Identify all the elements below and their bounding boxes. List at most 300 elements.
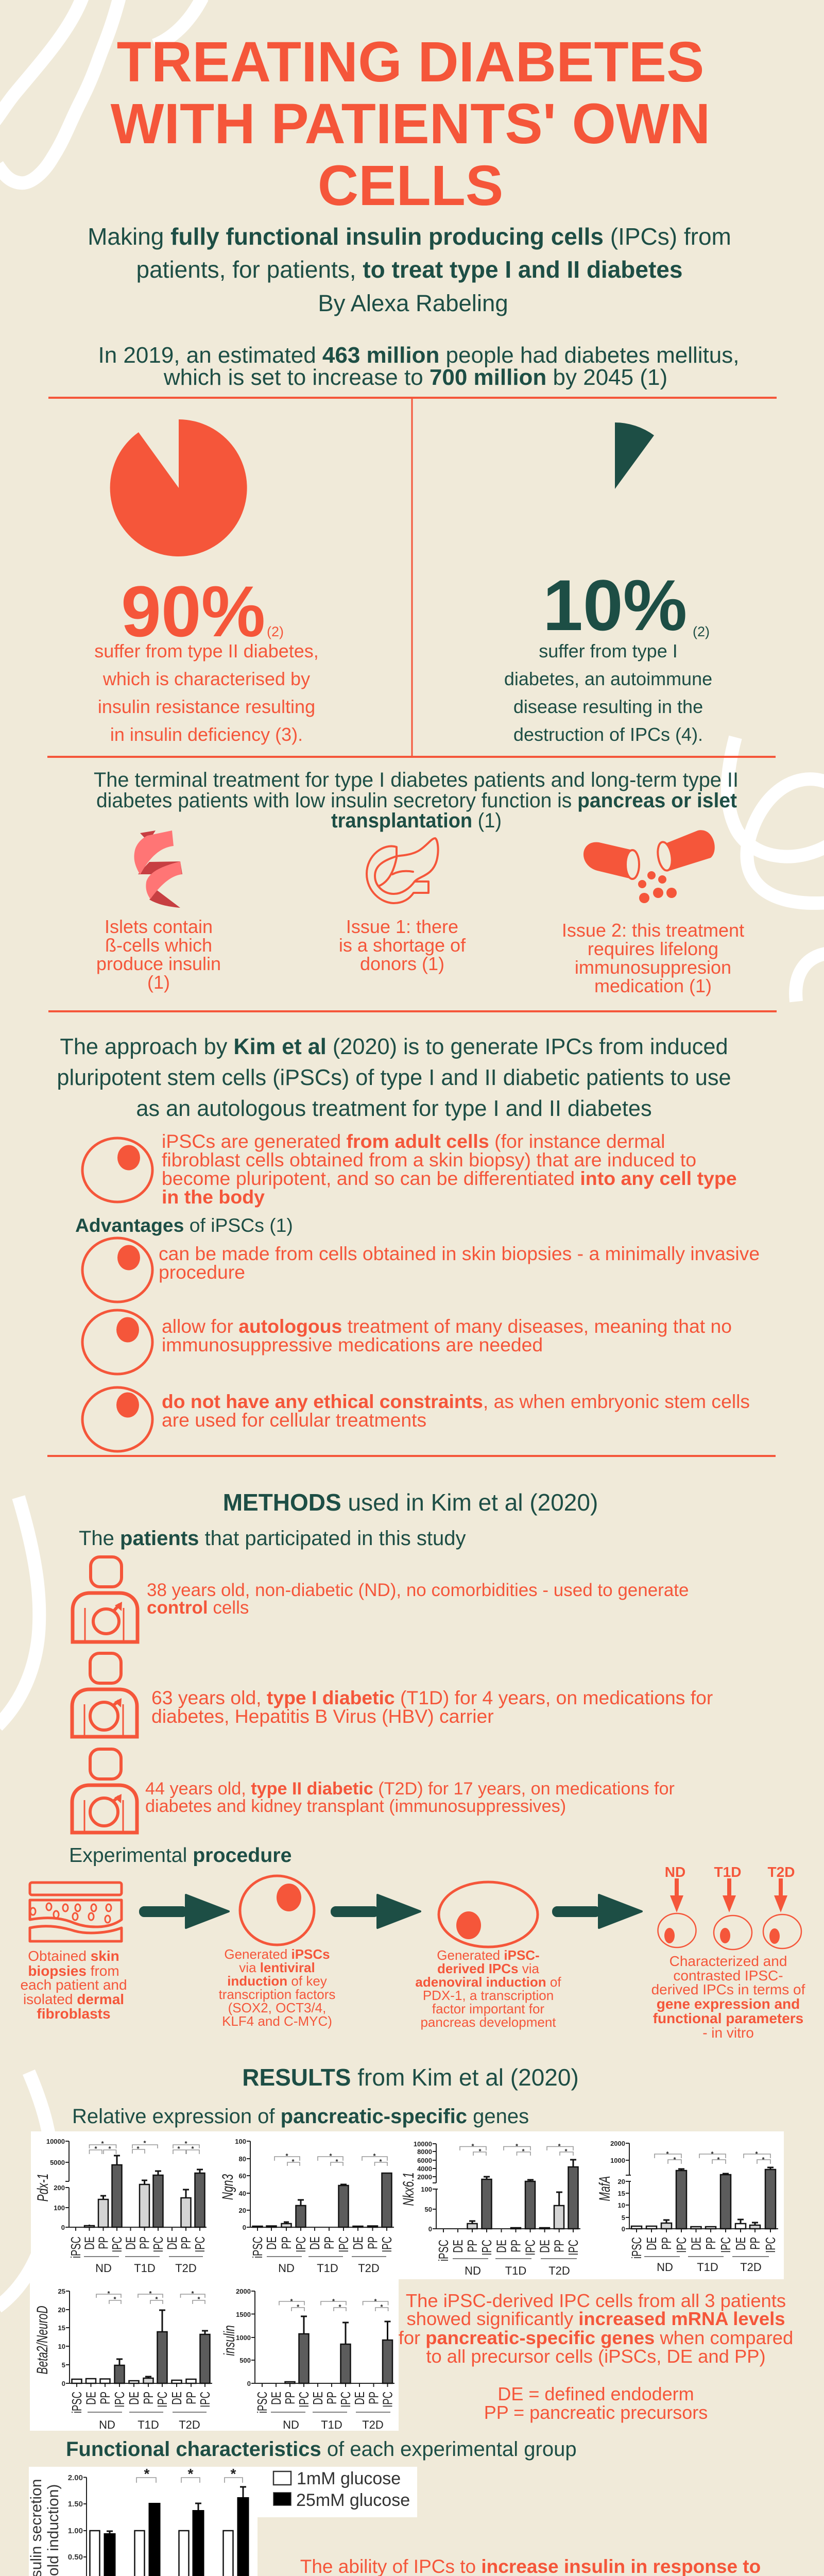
advantage 1	[159, 1243, 760, 1283]
icon: pills	[583, 830, 715, 903]
chart: Nkx6.1: IPC	[479, 2240, 494, 2256]
chart: insulin: 0	[247, 2380, 251, 2387]
chart: Beta2/NeuroD: 5	[62, 2361, 65, 2369]
chart: Pdx-1: *	[184, 2140, 187, 2147]
chart: insulin secretion: 2.00	[68, 2473, 83, 2482]
patient 1 text: control cells	[147, 1598, 249, 1618]
terminal treatment text: transplantation (1)	[331, 809, 502, 832]
chart: Pdx-1: T2D	[175, 2262, 197, 2275]
approach text: as an autologous treatment for type I and II diabetes	[136, 1096, 652, 1121]
chart: Ngn3: IPC	[380, 2236, 394, 2252]
icon: cell 4	[82, 1387, 152, 1451]
description: which is characterised by	[102, 668, 310, 689]
chart: insulin: IPC	[338, 2392, 353, 2408]
title: WITH PATIENTS' OWN	[111, 92, 710, 156]
approach text: pluripotent stem cells (iPSCs) of type I and II diabetic patients to use	[57, 1065, 731, 1090]
chart: insulin: *	[380, 2303, 383, 2311]
chart: Nkx6.1: Nkx6.1	[401, 2172, 417, 2206]
description: disease resulting in the	[513, 696, 703, 717]
chart: MafA: IPC	[763, 2237, 778, 2253]
chart: Nkx6.1: 0	[428, 2225, 432, 2233]
caption: characterization: derived IPCs in terms of	[651, 1981, 805, 1997]
approach text: The approach by Kim et al (2020) is to generate IPCs from induced	[60, 1035, 728, 1059]
caption: characterization: functional parameters	[653, 2010, 803, 2026]
caption: iPSC generation	[219, 1946, 335, 2029]
chart: Ngn3: DE	[351, 2236, 366, 2250]
chart: Ngn3: *	[285, 2152, 288, 2160]
description: destruction of IPCs (4).	[513, 724, 703, 745]
caption: characterization: - in vitro	[702, 2025, 754, 2041]
terminal treatment text	[94, 769, 739, 832]
approach text	[57, 1035, 731, 1121]
chart: Nkx6.1: PP	[552, 2240, 566, 2252]
chart: insulin: *	[290, 2297, 293, 2305]
intro statistic text: which is set to increase to 700 million by 2045 (1)	[163, 365, 667, 390]
functional heading: Functional characteristics of each experimental group	[66, 2438, 577, 2461]
chart: insulin secretion: *	[144, 2466, 150, 2482]
chart: Pdx-1: PP	[138, 2236, 152, 2249]
chart: Ngn3	[220, 2138, 394, 2275]
chart: MafA: 1000	[610, 2157, 625, 2164]
icon: iPSC cell	[240, 1876, 314, 1945]
caption: iPSC generation: induction of key	[227, 1973, 327, 1989]
chart: Nkx6.1: ND	[465, 2264, 481, 2277]
panel: type I diabetes 10%	[504, 422, 712, 745]
chart: Ngn3: 80	[239, 2155, 246, 2163]
chart: insulin: T2D	[362, 2418, 384, 2431]
icon: cell 2	[82, 1238, 152, 1302]
abbreviations legend	[484, 2383, 708, 2423]
chart: Beta2/NeuroD: *	[191, 2290, 194, 2297]
chart: Beta2/NeuroD: DE	[127, 2392, 142, 2405]
chart: Nkx6.1: DE	[494, 2240, 509, 2253]
chart: Nkx6.1: DE	[538, 2240, 552, 2253]
description: insulin resistance resulting	[98, 696, 315, 717]
patient 3 text	[145, 1779, 675, 1816]
chart: Nkx6.1: IPC	[523, 2240, 538, 2256]
chart: insulin secretion	[28, 2466, 251, 2576]
title: TREATING DIABETES	[117, 30, 704, 94]
caption: issue 1: donors (1)	[360, 953, 444, 974]
icon: skin	[30, 1883, 122, 1941]
caption: iPSC generation: transcription factors	[219, 1987, 335, 2002]
results text: mRNA levels: showed significantly increased mRNA levels	[407, 2308, 785, 2329]
caption: characterization: Characterized and	[670, 1953, 787, 1969]
patient 2 text: diabetes, Hepatitis B Virus (HBV) carrier	[151, 1705, 494, 1727]
advantages heading: Advantages of iPSCs (1)	[75, 1214, 293, 1236]
chart: Beta2/NeuroD: 0	[62, 2380, 65, 2387]
title	[111, 30, 710, 217]
group labels and arrows: ND	[665, 1864, 685, 1880]
group labels and arrows: T2D	[768, 1864, 795, 1880]
chart: MafA: T1D	[697, 2261, 718, 2274]
caption: iPSC generation: Generated iPSCs	[224, 1946, 330, 1962]
group labels and arrows	[658, 1864, 801, 1950]
chart: Pdx-1: *	[101, 2140, 104, 2147]
chart: Ngn3: *	[373, 2152, 376, 2160]
expression heading: Relative expression of pancreatic-specific genes	[72, 2105, 529, 2128]
description: diabetes, an autoimmune	[504, 668, 712, 689]
chart: Beta2/NeuroD: 25	[58, 2287, 65, 2295]
chart: Pdx-1: T1D	[134, 2262, 156, 2275]
panel: gene expression charts top	[31, 2131, 784, 2279]
caption: issue 2: Issue 2: this treatment	[562, 920, 744, 941]
caption: issue 2: medication (1)	[594, 975, 712, 996]
chart: insulin: *	[297, 2303, 300, 2311]
chart: insulin: *	[338, 2303, 341, 2311]
chart: Beta2/NeuroD: DE	[169, 2392, 184, 2405]
legend	[258, 2467, 417, 2517]
chart: insulin secretion: *	[231, 2466, 236, 2482]
chart: Nkx6.1: 8000	[417, 2148, 432, 2156]
chart: Nkx6.1: *	[564, 2147, 568, 2155]
chart: Pdx-1: Pdx-1	[35, 2174, 52, 2201]
advantage 2: allow for autologous treatment of many diseases, meaning that no	[162, 1315, 732, 1337]
subtitle: patients, for patients, to treat type I and II diabetes	[136, 256, 682, 283]
chart: Nkx6.1: 4000	[417, 2165, 432, 2173]
results heading: RESULTS from Kim et al (2020)	[242, 2064, 579, 2091]
chart: Pdx-1: DE	[165, 2236, 180, 2250]
chart: Nkx6.1: *	[471, 2142, 474, 2150]
patient 3 text: 44 years old, type II diabetic (T2D) for 17 years, on medications for	[145, 1779, 675, 1799]
chart: MafA: *	[673, 2156, 676, 2163]
chart: Pdx-1: *	[191, 2145, 194, 2153]
chart: Beta2/NeuroD: Beta2/NeuroD	[35, 2306, 51, 2374]
chart: Nkx6.1: iPSC	[436, 2240, 451, 2261]
description	[94, 640, 319, 745]
patient 2 text	[151, 1687, 713, 1727]
chart: Ngn3: IPC	[336, 2236, 351, 2252]
chart: Pdx-1: iPSC	[68, 2236, 83, 2258]
chart: insulin	[221, 2287, 395, 2431]
chart: insulin: *	[374, 2297, 377, 2305]
stat: 90%: 90%	[121, 571, 265, 652]
chart: insulin: 2000	[236, 2287, 251, 2295]
advantage 2	[162, 1315, 732, 1355]
caption: characterization: contrasted IPSC-	[673, 1968, 783, 1984]
chart: Pdx-1: IPC	[193, 2236, 208, 2252]
chart: MafA: PP	[703, 2237, 718, 2250]
chart: MafA: 10	[618, 2201, 625, 2209]
chart: MafA: PP	[659, 2237, 674, 2250]
icon: pancreas	[367, 838, 438, 903]
chart: insulin: 1500	[236, 2311, 251, 2318]
chart: MafA	[597, 2140, 778, 2274]
subtitle: Making fully functional insulin producing cells (IPCs) from	[88, 223, 731, 250]
results text: mRNA levels	[399, 2290, 793, 2367]
caption: biopsy: Obtained skin	[28, 1948, 119, 1964]
results text: mRNA levels: to all precursor cells (iPSCs, DE and PP)	[426, 2346, 766, 2367]
chart: Beta2/NeuroD: iPSC	[70, 2392, 84, 2413]
chart: MafA: *	[755, 2150, 758, 2158]
chart: Nkx6.1: 2000	[417, 2173, 432, 2181]
chart: insulin: T1D	[321, 2418, 342, 2431]
chart: insulin: DE	[352, 2392, 367, 2405]
chart: Nkx6.1	[401, 2140, 581, 2277]
patient 1 text	[147, 1580, 689, 1618]
caption: issue 1	[339, 916, 466, 974]
advantage 3	[162, 1391, 750, 1431]
terminal treatment text: The terminal treatment for type I diabetes patients and long-term type II	[94, 769, 739, 791]
methods heading: METHODS used in Kim et al (2020)	[223, 1489, 598, 1516]
stat: 10%: 10%	[543, 565, 687, 646]
chart: MafA: ND	[657, 2261, 673, 2274]
chart: Pdx-1: IPC	[110, 2236, 125, 2252]
chart: MafA: *	[666, 2150, 669, 2158]
icon: IPC cell	[439, 1882, 538, 1947]
group labels and arrows: T1D	[714, 1864, 741, 1880]
chart: Pdx-1: PP	[179, 2236, 194, 2249]
chart: Nkx6.1: T1D	[505, 2264, 526, 2277]
chart: Beta2/NeuroD: T2D	[179, 2418, 200, 2431]
caption: IPC generation	[415, 1947, 561, 2030]
chart: Pdx-1: 10000	[46, 2138, 65, 2145]
caption: IPC generation: pancreas development	[420, 2014, 556, 2030]
chart: Pdx-1: PP	[96, 2236, 111, 2249]
chart: Ngn3: 0	[243, 2224, 246, 2231]
caption: IPC generation: PDX-1, a transcription	[423, 1988, 554, 2003]
iPSC description	[162, 1130, 737, 1208]
icon: patient 3	[72, 1749, 137, 1833]
chart: Ngn3: *	[291, 2158, 295, 2165]
iPSC description: in the body	[162, 1186, 265, 1208]
chart: insulin: PP	[324, 2392, 339, 2404]
chart: Pdx-1: 0	[61, 2224, 65, 2231]
terminal treatment text: diabetes patients with low insulin secretory function is pancreas or islet	[96, 789, 737, 812]
chart: insulin secretion: 1.50	[68, 2500, 83, 2509]
chart: Pdx-1: 5000	[50, 2159, 65, 2166]
chart: Ngn3: 40	[239, 2190, 246, 2197]
chart: insulin: PP	[366, 2392, 381, 2404]
chart: Beta2/NeuroD: T1D	[138, 2418, 159, 2431]
chart: insulin: insulin	[221, 2325, 238, 2356]
chart: Ngn3: Ngn3	[220, 2174, 236, 2200]
chart: Beta2/NeuroD: *	[113, 2295, 116, 2303]
arrow 1	[140, 1895, 229, 1928]
advantage 2: immunosuppressive medications are needed	[162, 1334, 543, 1355]
chart: Beta2/NeuroD: ND	[99, 2418, 115, 2431]
chart: Beta2/NeuroD: PP	[184, 2392, 199, 2404]
caption: issue 1: Issue 1: there	[346, 916, 458, 937]
caption: biopsy: fibroblasts	[37, 2006, 111, 2022]
chart: Nkx6.1: PP	[508, 2240, 523, 2252]
icon: cell 3	[82, 1310, 152, 1374]
intro statistic text	[98, 343, 740, 390]
chart: MafA: iPSC	[629, 2237, 644, 2259]
advantage 1: procedure	[159, 1261, 245, 1283]
reference marker: (2)	[267, 624, 284, 639]
chart: MafA: DE	[733, 2237, 748, 2250]
pie chart: 10%	[615, 422, 654, 489]
chart: Nkx6.1: *	[522, 2147, 525, 2155]
chart: MafA: PP	[748, 2237, 763, 2250]
caption: biopsy	[20, 1948, 127, 2022]
pie chart: 90%	[110, 419, 247, 556]
chart: Ngn3: *	[329, 2152, 332, 2160]
chart: Beta2/NeuroD: PP	[141, 2392, 156, 2404]
chart: MafA: DE	[689, 2237, 703, 2250]
chart: Beta2/NeuroD	[35, 2287, 213, 2431]
chart: Pdx-1: 200	[54, 2184, 65, 2192]
reference marker: (2)	[693, 624, 710, 639]
icon: patient 1	[73, 1557, 138, 1642]
iPSC description: become pluripotent, and so can be differentiated into any cell type	[162, 1167, 737, 1189]
legend: 25mM glucose	[296, 2490, 410, 2510]
iPSC description: iPSCs are generated from adult cells (for instance dermal	[162, 1130, 665, 1152]
subtitle: By Alexa Rabeling	[318, 290, 508, 316]
chart: MafA: 15	[618, 2190, 625, 2197]
advantage 3: do not have any ethical constraints, as when embryonic stem cells	[162, 1391, 750, 1412]
chart: Nkx6.1: DE	[451, 2240, 466, 2253]
caption: iPSC generation: (SOX2, OCT3/4,	[228, 2000, 326, 2015]
caption: issue 2: requires lifelong	[588, 938, 718, 959]
chart: Nkx6.1: *	[478, 2147, 482, 2155]
chart: Beta2/NeuroD: *	[197, 2295, 200, 2303]
chart: insulin: *	[332, 2297, 335, 2305]
chart: Beta2/NeuroD: DE	[83, 2392, 98, 2405]
chart: Ngn3: *	[379, 2158, 382, 2165]
chart: insulin: 1000	[236, 2334, 251, 2342]
patient 3 text: diabetes and kidney transplant (immunosuppressives)	[145, 1797, 566, 1816]
chart: Beta2/NeuroD: *	[107, 2290, 110, 2297]
chart: insulin: ND	[283, 2418, 299, 2431]
chart: Ngn3: *	[335, 2158, 338, 2165]
caption: biopsy: isolated dermal	[23, 1991, 124, 2007]
chart: MafA: T2D	[740, 2261, 762, 2274]
chart: Nkx6.1: 50	[425, 2206, 432, 2213]
caption: islets: ß-cells which	[105, 935, 212, 956]
chart: Nkx6.1: 6000	[417, 2157, 432, 2164]
description: in insulin deficiency (3).	[110, 724, 303, 745]
chart: Nkx6.1: IPC	[566, 2240, 581, 2256]
chart: Ngn3: PP	[322, 2236, 337, 2249]
caption: IPC generation: Generated iPSC-	[437, 1947, 540, 1963]
caption: issue 2: immunosuppresion	[575, 957, 731, 978]
chart: Pdx-1: *	[177, 2145, 180, 2153]
chart: Pdx-1: 100	[54, 2204, 65, 2212]
chart: insulin: DE	[311, 2392, 325, 2405]
chart: Ngn3: 20	[239, 2207, 246, 2214]
chart: Pdx-1: DE	[82, 2236, 97, 2250]
caption: IPC generation: factor important for	[432, 2001, 544, 2016]
chart: Beta2/NeuroD: IPC	[155, 2392, 170, 2408]
chart: Pdx-1: *	[108, 2145, 111, 2153]
arrow 3	[553, 1895, 642, 1928]
caption: characterization: gene expression and	[657, 1996, 800, 2012]
caption: biopsy: biopsies from	[28, 1963, 119, 1979]
caption: characterization	[651, 1953, 805, 2041]
description: suffer from type I	[539, 640, 678, 662]
chart: MafA: MafA	[597, 2176, 613, 2201]
chart: Nkx6.1: 10000	[414, 2140, 432, 2148]
chart: Ngn3: iPSC	[250, 2236, 265, 2258]
chart: Pdx-1: IPC	[151, 2236, 166, 2252]
caption: IPC generation: derived IPCs via	[437, 1961, 540, 1976]
chart: MafA: IPC	[718, 2237, 733, 2253]
chart: insulin secretion: 0.50	[68, 2553, 83, 2562]
arrow 2	[332, 1895, 420, 1928]
icon: islet ribbon	[134, 831, 182, 908]
caption: islets	[96, 916, 221, 993]
chart: insulin secretion: *	[188, 2466, 194, 2482]
caption: islets: Islets contain	[105, 916, 213, 937]
abbreviations legend: PP = pancreatic precursors	[484, 2402, 708, 2423]
chart: Beta2/NeuroD: PP	[98, 2392, 113, 2404]
chart: Pdx-1: *	[143, 2139, 146, 2147]
icon: cell 1	[82, 1138, 152, 1202]
advantage 3: are used for cellular treatments	[162, 1409, 426, 1431]
results text: mRNA levels: The iPSC-derived IPC cells from all 3 patients	[406, 2290, 786, 2311]
caption: islets: produce insulin	[96, 953, 221, 974]
chart: MafA: *	[717, 2156, 720, 2163]
chart: MafA: 5	[622, 2214, 625, 2222]
chart: Pdx-1: *	[94, 2145, 97, 2153]
chart: Beta2/NeuroD: *	[155, 2295, 158, 2303]
panel: gene expression charts bottom	[30, 2279, 399, 2431]
chart: Nkx6.1: T2D	[548, 2264, 570, 2277]
chart: Ngn3: T1D	[317, 2262, 338, 2275]
chart: Beta2/NeuroD: 15	[58, 2324, 65, 2332]
patients heading: The patients that participated in this study	[79, 1527, 466, 1550]
caption: iPSC generation: KLF4 and C-MYC)	[222, 2013, 332, 2029]
chart: Beta2/NeuroD: *	[149, 2290, 152, 2297]
intro statistic text: In 2019, an estimated 463 million people had diabetes mellitus,	[98, 343, 740, 368]
chart: Ngn3: ND	[278, 2262, 295, 2275]
subtitle	[88, 223, 731, 316]
title: CELLS	[318, 154, 503, 217]
chart: MafA: IPC	[674, 2237, 689, 2253]
chart: Pdx-1	[35, 2138, 208, 2275]
abbreviations legend: DE = defined endoderm	[497, 2383, 694, 2404]
chart: MafA: *	[762, 2156, 765, 2163]
chart: insulin: IPC	[297, 2392, 312, 2408]
chart: insulin: iPSC	[255, 2392, 270, 2413]
chart: Ngn3: PP	[279, 2236, 294, 2249]
chart: MafA: 2000	[610, 2140, 625, 2147]
panel: type II diabetes 90%	[94, 419, 319, 745]
chart: insulin secretion: 1.00	[68, 2527, 83, 2535]
chart: Beta2/NeuroD: IPC	[112, 2392, 127, 2408]
description: suffer from type II diabetes,	[94, 640, 319, 662]
chart: insulin: DE	[269, 2392, 284, 2405]
procedure heading: Experimental procedure	[69, 1844, 291, 1867]
chart: Ngn3: T2D	[358, 2262, 380, 2275]
chart: Pdx-1: ND	[95, 2262, 112, 2275]
caption: issue 2	[562, 920, 744, 996]
chart: MafA: DE	[644, 2237, 659, 2250]
chart: Nkx6.1: 100	[421, 2185, 432, 2193]
chart: Beta2/NeuroD: 20	[58, 2306, 65, 2314]
chart: Pdx-1: DE	[123, 2236, 138, 2250]
icon: patient 2	[72, 1653, 137, 1737]
chart: Pdx-1: *	[136, 2145, 140, 2153]
patient 1 text: 38 years old, non-diabetic (ND), no comorbidities - used to generate	[147, 1580, 689, 1600]
chart: Beta2/NeuroD: 10	[58, 2343, 65, 2350]
chart: insulin: 500	[239, 2357, 251, 2364]
patient 2 text: 63 years old, type I diabetic (T1D) for 4 years, on medications for	[151, 1687, 713, 1708]
chart: Ngn3: PP	[365, 2236, 380, 2249]
panel: functional charts	[29, 2467, 258, 2576]
chart: MafA: 20	[618, 2178, 625, 2185]
chart: Ngn3: DE	[307, 2236, 322, 2250]
chart: Nkx6.1: *	[558, 2142, 561, 2150]
caption: iPSC generation: via lentiviral	[239, 1960, 315, 1975]
chart: MafA: 0	[622, 2225, 625, 2233]
chart: insulin: PP	[283, 2392, 298, 2404]
chart: MafA: *	[711, 2150, 714, 2158]
chart: Ngn3: IPC	[294, 2236, 308, 2252]
caption: IPC generation: adenoviral induction of	[415, 1974, 561, 1990]
